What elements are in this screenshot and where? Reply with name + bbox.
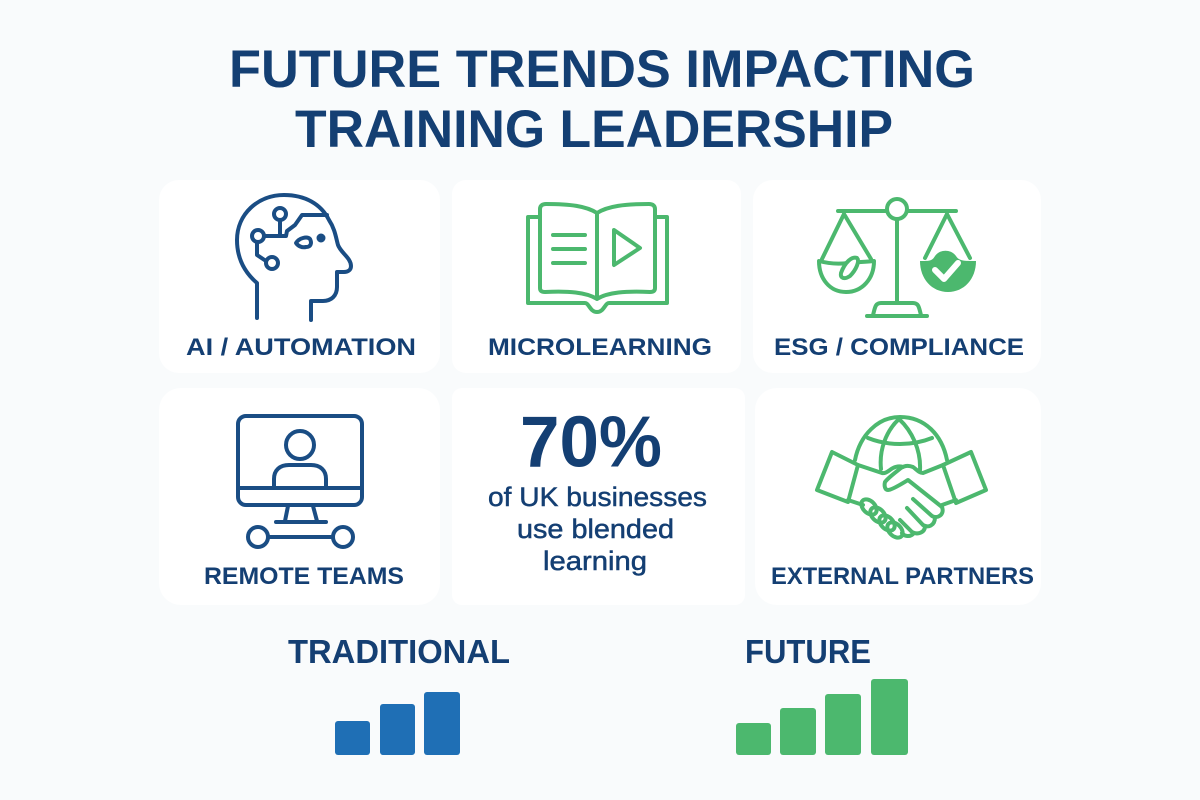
bars: Traditional bbox=[335, 692, 460, 755]
icon: book with play bbox=[528, 204, 667, 312]
chart: Traditional bbox=[288, 633, 510, 755]
title bbox=[229, 40, 975, 159]
label: ESG / Compliance: ESG / COMPLIANCE bbox=[774, 334, 1024, 361]
icon: globe and handshake bbox=[817, 417, 986, 541]
chart: Future bbox=[736, 633, 908, 755]
panel: Remote Teams bbox=[159, 388, 440, 605]
panel: AI / Automation bbox=[159, 180, 440, 373]
text: blended learning: of UK businesses bbox=[488, 482, 707, 512]
title: FUTURE TRENDS IMPACTING bbox=[229, 40, 975, 99]
text: blended learning: learning bbox=[543, 546, 647, 576]
panel: Microlearning bbox=[452, 180, 741, 373]
label: Remote Teams: REMOTE TEAMS bbox=[204, 563, 404, 590]
text: blended learning bbox=[488, 482, 707, 576]
heading: Future: FUTURE bbox=[745, 633, 871, 670]
label: Microlearning: MICROLEARNING bbox=[488, 334, 712, 361]
panel: External Partners bbox=[755, 388, 1041, 605]
icon: AI head bbox=[237, 195, 351, 320]
stat: 70%: 70% bbox=[520, 402, 662, 482]
heading: Traditional: TRADITIONAL bbox=[288, 633, 510, 670]
title: TRAINING LEADERSHIP bbox=[295, 100, 893, 159]
icon: balance scale bbox=[819, 199, 976, 316]
panel: ESG / Compliance bbox=[753, 180, 1041, 373]
label: AI / Automation: AI / AUTOMATION bbox=[186, 334, 416, 361]
text: blended learning: use blended bbox=[517, 514, 674, 544]
icon: monitor with person bbox=[238, 416, 362, 547]
label: External Partners: EXTERNAL PARTNERS bbox=[771, 563, 1034, 590]
bars: Future bbox=[736, 679, 908, 755]
panel: 70% statistic bbox=[452, 388, 745, 605]
